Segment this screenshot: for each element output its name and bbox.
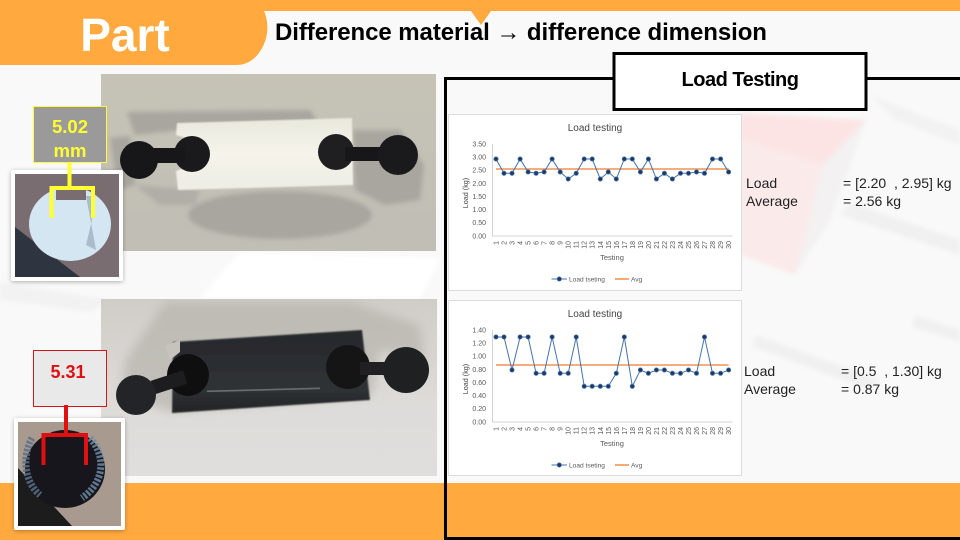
line chart: black part load testing: 0.80 (472, 367, 486, 374)
line chart: black part load testing: Avg (631, 462, 643, 469)
line chart: white part load testing: 0.00 (472, 233, 486, 240)
line chart: white part load testing: Testing (600, 253, 624, 262)
line chart: white part load testing: 0.50 (472, 220, 486, 227)
line chart: white part load testing: 1.00 (472, 207, 486, 214)
line chart: white part load testing: 3.50 (472, 142, 486, 148)
line chart: black part load testing: 10 (566, 427, 573, 435)
line chart: white part load testing: 21 (654, 241, 661, 249)
line chart: white part load testing: 5 (526, 241, 533, 245)
line chart: black part load testing: 18 (630, 427, 637, 435)
line chart: black part load testing: 0.60 (472, 380, 486, 387)
line chart: white part load testing: 3.00 (472, 155, 486, 162)
line chart: black part load testing (448, 300, 742, 476)
line chart: white part load testing: 23 (670, 241, 677, 249)
line chart: black part load testing: 23 (670, 427, 677, 435)
line chart: white part load testing: 27 (702, 241, 709, 249)
line chart: white part load testing: 2 (502, 241, 508, 245)
inset photo: black part end (14, 418, 125, 530)
line chart: black part load testing: 9 (558, 427, 565, 431)
line chart: white part load testing: 9 (558, 241, 565, 245)
line chart: white part load testing: 4 (518, 241, 525, 245)
photo: white part (101, 74, 436, 251)
line chart: black part load testing: 6 (534, 427, 541, 431)
line chart: white part load testing: 7 (542, 241, 549, 245)
top orange band (0, 0, 960, 11)
stats: black part: Average (744, 381, 796, 397)
stats: black part: Load (744, 363, 775, 379)
photo: black part (101, 299, 437, 476)
line chart: white part load testing: Load tseting (569, 276, 605, 283)
line chart: white part load testing: 1 (494, 241, 500, 245)
line chart: white part load testing: 11 (574, 241, 581, 248)
line chart: black part load testing: Testing (600, 439, 624, 448)
label: 5.02 mm: 5.02 (52, 116, 88, 137)
line chart: white part load testing: 19 (638, 241, 645, 249)
stats: white part (746, 175, 952, 209)
line chart: black part load testing: 1.20 (472, 341, 486, 348)
line chart: white part load testing: 29 (718, 241, 725, 249)
line chart: black part load testing: 19 (638, 427, 645, 435)
line chart: black part load testing: 20 (646, 427, 653, 435)
line chart: white part load testing (448, 114, 742, 290)
stats: white part: = 2.56 kg (843, 193, 901, 209)
line chart: black part load testing: 24 (678, 427, 685, 435)
line chart: black part load testing: 2 (502, 427, 508, 431)
line chart: white part load testing: 17 (622, 241, 629, 249)
line chart: white part load testing: 22 (662, 241, 669, 249)
line chart: black part load testing: 3 (510, 427, 516, 431)
stats: white part: Load (746, 175, 777, 191)
heading tab: Part (0, 0, 267, 65)
line chart: black part load testing: 27 (702, 427, 709, 435)
panel: load testing frame (446, 78, 960, 538)
bracket: yellow dimension (52, 163, 93, 218)
line chart: black part load testing: Load tseting (569, 462, 605, 469)
line chart: black part load testing: 1 (494, 427, 500, 431)
line chart: white part load testing: 16 (614, 241, 621, 249)
line chart: white part load testing: Load (kg) (461, 178, 470, 208)
heading tab: Part: Part (80, 9, 170, 61)
line chart: white part load testing: 25 (686, 241, 693, 249)
line chart: white part load testing: 10 (566, 241, 573, 249)
inset photo: white part end (11, 170, 123, 281)
stats: black part: = [0.5 , 1.30] kg (841, 363, 942, 379)
line chart: white part load testing: 26 (694, 241, 701, 249)
title tab notch (471, 11, 491, 25)
bottom orange band (0, 483, 960, 540)
line chart: black part load testing: 8 (550, 427, 557, 431)
line chart: white part load testing: 3 (510, 241, 516, 245)
line chart: black part load testing: 0.20 (472, 406, 486, 413)
line chart: black part load testing: Load (kg) (461, 364, 470, 394)
stats: white part: = [2.20 , 2.95] kg (843, 175, 952, 191)
line chart: white part load testing: 14 (598, 241, 605, 249)
line chart: white part load testing: 28 (710, 241, 717, 249)
line chart: white part load testing: Avg (631, 276, 643, 283)
line chart: black part load testing: 22 (662, 427, 669, 435)
line chart: black part load testing: 26 (694, 427, 701, 435)
stats: black part (744, 363, 942, 397)
line chart: black part load testing: 16 (614, 427, 621, 435)
label: 5.31: 5.31 (50, 362, 86, 382)
panel heading: Load Testing (614, 54, 866, 110)
line chart: black part load testing: 4 (518, 427, 525, 431)
line chart: black part load testing: 29 (718, 427, 725, 435)
line chart: white part load testing: 6 (534, 241, 541, 245)
line chart: white part load testing: Load testing (568, 123, 622, 134)
line chart: white part load testing: 1.50 (472, 194, 486, 201)
line chart: white part load testing: 24 (678, 241, 685, 249)
line chart: black part load testing: 28 (710, 427, 717, 435)
line chart: black part load testing: 25 (686, 427, 693, 435)
line chart: white part load testing: 13 (590, 241, 597, 249)
bracket: red dimension (44, 405, 86, 465)
label: 5.02 mm: mm (54, 140, 86, 161)
title: Difference material → difference dimension (275, 19, 767, 46)
panel heading: Load Testing: Load Testing (682, 69, 798, 91)
line chart: white part load testing: 18 (630, 241, 637, 249)
line chart: black part load testing: 1.40 (472, 328, 486, 334)
line chart: black part load testing: 7 (542, 427, 549, 431)
line chart: black part load testing: 14 (598, 427, 605, 435)
stats: black part: = 0.87 kg (841, 381, 899, 397)
line chart: black part load testing: 1.00 (472, 354, 486, 361)
line chart: black part load testing: 30 (726, 427, 733, 435)
line chart: black part load testing: 5 (526, 427, 533, 431)
line chart: white part load testing: 8 (550, 241, 557, 245)
line chart: white part load testing: 12 (582, 241, 589, 249)
line chart: black part load testing: Load testing (568, 309, 622, 320)
line chart: white part load testing: 2.50 (472, 168, 486, 175)
line chart: white part load testing: 20 (646, 241, 653, 249)
line chart: black part load testing: 15 (606, 427, 613, 435)
line chart: black part load testing: 0.40 (472, 393, 486, 400)
line chart: black part load testing: 0.00 (472, 419, 486, 426)
line chart: black part load testing: 13 (590, 427, 597, 435)
line chart: white part load testing: 30 (726, 241, 733, 249)
stats: white part: Average (746, 193, 798, 209)
line chart: black part load testing: 12 (582, 427, 589, 435)
label: 5.02 mm (34, 106, 106, 162)
label: 5.31 (34, 350, 106, 406)
line chart: black part load testing: 21 (654, 427, 661, 435)
line chart: black part load testing: 11 (574, 427, 581, 434)
line chart: white part load testing: 15 (606, 241, 613, 249)
line chart: white part load testing: 2.00 (472, 181, 486, 188)
line chart: black part load testing: 17 (622, 427, 629, 435)
